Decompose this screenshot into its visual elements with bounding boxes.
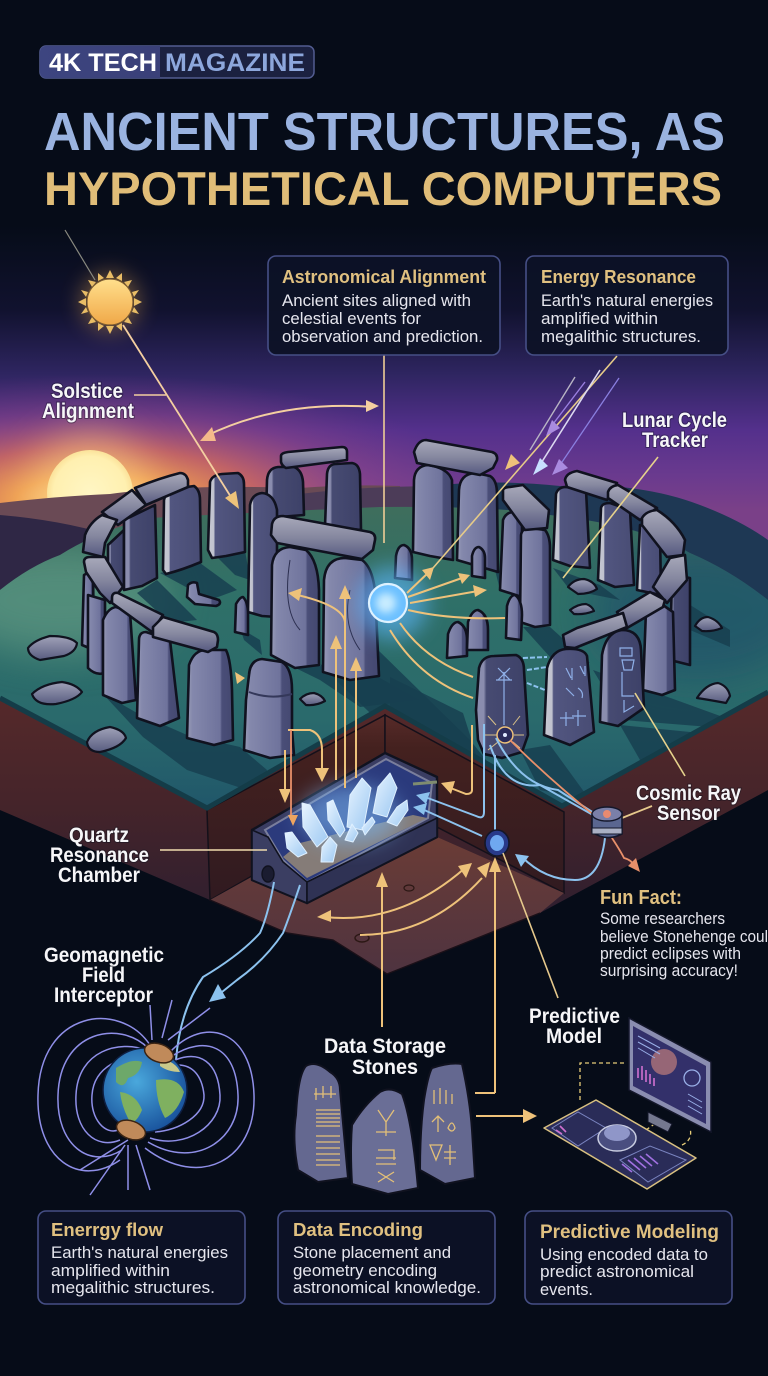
label: solstice alignment: Solstice bbox=[51, 380, 123, 403]
label: lunar cycle tracker bbox=[622, 409, 727, 452]
panel: predictive modeling: events. bbox=[540, 1280, 593, 1299]
label: geomagnetic field interceptor: Field bbox=[82, 964, 125, 987]
label: cosmic ray sensor bbox=[636, 782, 741, 825]
panel: energy flow: amplified within bbox=[51, 1261, 170, 1280]
energy arrows from node bbox=[390, 567, 505, 698]
right back trilithon bbox=[413, 440, 498, 572]
quartz chamber exit lines to geomagnetic field bbox=[176, 882, 300, 1060]
panel: data encoding: Stone placement and bbox=[293, 1243, 451, 1262]
panel: astronomical alignment: Astronomical Alignment bbox=[282, 266, 486, 287]
left outer stone arc bbox=[83, 473, 245, 590]
distant hills bbox=[0, 482, 768, 620]
glowing energy node bbox=[356, 567, 428, 639]
label: lunar cycle tracker: Lunar Cycle bbox=[622, 409, 727, 432]
fun fact: Some researchers bbox=[600, 909, 725, 928]
setting sun bbox=[30, 433, 150, 553]
label: quartz resonance chamber: Chamber bbox=[58, 864, 140, 887]
arrows between sensors and chamber bbox=[413, 657, 640, 880]
label: quartz resonance chamber bbox=[50, 824, 149, 887]
quartz crystals bbox=[285, 773, 408, 862]
small standing stones bbox=[187, 545, 522, 658]
underground lens node bbox=[485, 830, 509, 856]
fun fact bbox=[600, 887, 768, 980]
label: predictive model bbox=[529, 1005, 620, 1048]
panel: energy resonance: amplified within bbox=[541, 309, 658, 328]
title bbox=[44, 102, 725, 215]
data storage stones bbox=[294, 1064, 475, 1194]
tall slender stone bbox=[248, 493, 277, 617]
curved arrows in soil bbox=[317, 857, 501, 1093]
panel: astronomical alignment: observation and prediction. bbox=[282, 327, 483, 346]
label: quartz resonance chamber: Resonance bbox=[50, 844, 149, 867]
astronomical leader line bbox=[383, 355, 385, 543]
panel: data encoding: Data Encoding bbox=[293, 1219, 423, 1240]
panel: data encoding: astronomical knowledge. bbox=[293, 1278, 481, 1297]
ground plate bbox=[0, 507, 768, 808]
title: ANCIENT STRUCTURES, AS bbox=[44, 102, 725, 162]
soil block under the ground plate bbox=[0, 690, 768, 974]
predictive leader line bbox=[503, 853, 558, 998]
label: solstice alignment: Alignment bbox=[42, 400, 134, 423]
label: cosmic ray sensor: Sensor bbox=[657, 802, 720, 825]
ground boulders bbox=[28, 579, 730, 752]
label: geomagnetic field interceptor: Interceptor bbox=[54, 984, 153, 1007]
sun ray arrows bbox=[65, 230, 379, 509]
label: cosmic ray sensor: Cosmic Ray bbox=[636, 782, 741, 805]
panel: energy resonance: megalithic structures. bbox=[541, 327, 701, 346]
label: solstice alignment bbox=[42, 380, 134, 423]
panel: astronomical alignment bbox=[268, 256, 500, 355]
label: data storage stones: Data Storage bbox=[324, 1035, 446, 1058]
globe icon bbox=[103, 1048, 187, 1132]
back left trilithon bbox=[266, 447, 361, 530]
title: HYPOTHETICAL COMPUTERS bbox=[44, 162, 722, 215]
panel: astronomical alignment: celestial events for bbox=[282, 309, 421, 328]
front centre trilithon bbox=[271, 516, 379, 680]
panel: predictive modeling: Using encoded data to bbox=[540, 1245, 708, 1264]
energy resonance beams bbox=[433, 356, 619, 568]
fun fact: predict eclipses with bbox=[600, 944, 741, 963]
holographic tablet bbox=[544, 1100, 696, 1189]
arrows rising from chamber to stones bbox=[235, 585, 362, 826]
label: data storage stones: Stones bbox=[352, 1056, 418, 1079]
cosmic ray sensor bbox=[592, 807, 622, 838]
panel: predictive modeling: predict astronomical bbox=[540, 1262, 694, 1281]
panel: energy flow: Enerrgy flow bbox=[51, 1219, 164, 1240]
label: predictive model: Model bbox=[546, 1025, 602, 1048]
fun fact: surprising accuracy! bbox=[600, 961, 738, 980]
panel: astronomical alignment: Ancient sites aligned with bbox=[282, 291, 471, 310]
panel: energy flow: Earth's natural energies bbox=[51, 1243, 228, 1262]
label: lunar cycle tracker: Tracker bbox=[642, 429, 708, 452]
solo front stone bbox=[244, 659, 294, 758]
geomagnetic field lines bbox=[38, 1000, 254, 1195]
header badge bbox=[40, 46, 314, 78]
header badge: 4K TECH bbox=[49, 49, 157, 77]
stone chamber bbox=[252, 753, 437, 903]
panel: predictive modeling bbox=[525, 1211, 732, 1304]
panel: data encoding bbox=[278, 1211, 495, 1304]
panel: energy resonance: Energy Resonance bbox=[541, 266, 696, 287]
label: quartz resonance chamber: Quartz bbox=[69, 824, 129, 847]
dashed links in dashboard bbox=[580, 1063, 691, 1145]
label: predictive model: Predictive bbox=[529, 1005, 620, 1028]
panel: energy flow: megalithic structures. bbox=[51, 1278, 215, 1297]
header badge: MAGAZINE bbox=[165, 49, 305, 77]
front right lintels and rune stones bbox=[544, 592, 665, 745]
panel: energy resonance bbox=[526, 256, 728, 355]
label: data storage stones bbox=[324, 1035, 446, 1079]
right trilithon bbox=[500, 485, 550, 627]
panel: energy resonance: Earth's natural energies bbox=[541, 291, 713, 310]
label: geomagnetic field interceptor: Geomagnetic bbox=[44, 944, 164, 967]
panel: predictive modeling: Predictive Modeling bbox=[540, 1221, 719, 1243]
right outer stone arc bbox=[553, 471, 690, 695]
excavated pit bbox=[207, 715, 564, 974]
fun fact: Fun Fact: bbox=[600, 887, 682, 909]
lunar and cosmic leader lines bbox=[160, 457, 685, 850]
sky gradient bbox=[0, 225, 768, 555]
label: geomagnetic field interceptor bbox=[44, 944, 164, 1007]
output arrows from stones bbox=[475, 1093, 537, 1123]
sun icon bbox=[78, 270, 142, 334]
panel: data encoding: geometry encoding bbox=[293, 1261, 437, 1280]
left front stone arc bbox=[82, 557, 233, 745]
inscribed rune stone with node bbox=[476, 655, 528, 758]
computer monitor bbox=[629, 1018, 711, 1132]
panel: energy flow bbox=[38, 1211, 245, 1304]
magnetic interceptor caps bbox=[114, 1039, 176, 1144]
